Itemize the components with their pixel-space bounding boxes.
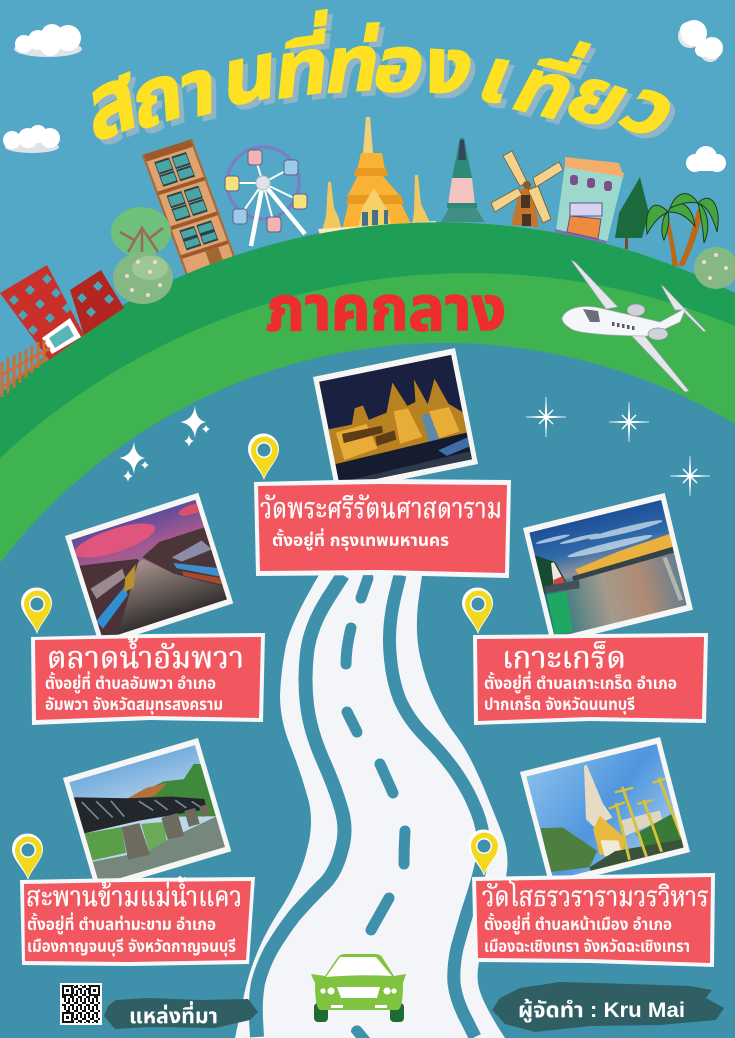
source label — [104, 998, 258, 1029]
pin: bottom left — [12, 834, 43, 880]
sparkles right — [526, 397, 710, 496]
icon: car — [311, 954, 406, 1022]
cloud top left — [14, 24, 82, 57]
card body: ตั้งอยู่ที่ กรุงเทพมหานคร — [272, 528, 449, 551]
card body: ตั้งอยู่ที่ ตำบลอัมพวา อำเภอ — [45, 671, 216, 694]
title shadow: ส — [86, 47, 147, 168]
pin: centre — [248, 434, 279, 480]
card: right: ปากเกร็ด จังหวัดนนทบุรี — [484, 694, 635, 715]
card body: ตั้งอยู่ที่ ตำบลเกาะเกร็ด อำเภอ — [484, 671, 677, 694]
green stupa — [441, 138, 485, 222]
hill: light green band — [0, 273, 735, 1038]
card: right — [473, 633, 708, 725]
tree behind building — [111, 207, 171, 258]
photo: Koh Kret — [523, 493, 693, 645]
card: bottom right: เมืองฉะเชิงเทรา จังหวัดฉะเชิงเทรา — [484, 937, 690, 956]
brick building — [142, 139, 236, 275]
road — [235, 575, 508, 1038]
road surface — [235, 575, 508, 1038]
hill: dark green — [0, 222, 735, 1038]
card: bottom left: เมืองกาญจนบุรี จังหวัดกาญจนบุรี — [27, 937, 236, 957]
cloud top right — [678, 20, 723, 62]
title shadow — [86, 13, 702, 168]
title text: ง — [412, 23, 486, 111]
temple — [318, 117, 436, 235]
photo: River Kwai bridge — [63, 738, 231, 891]
photo: Amphawa market — [65, 492, 236, 647]
road centre dashes — [346, 578, 405, 1038]
pine tree — [615, 177, 649, 249]
photo: Wat Sothon — [520, 737, 690, 887]
card title: ตลาดน้ำอัมพวา — [47, 636, 244, 675]
road right gap — [390, 575, 484, 1037]
card: bottom left — [20, 876, 255, 966]
ferris wheel — [225, 147, 320, 259]
title text: ว — [605, 65, 697, 153]
card: centre — [254, 479, 511, 578]
title shadow: ท่ — [324, 24, 393, 115]
title text: ที่ — [499, 33, 598, 136]
title shadow: เ — [471, 37, 533, 124]
card: bottom right — [472, 873, 715, 967]
title text: น — [222, 24, 278, 125]
pin: bottom right — [468, 830, 499, 876]
card: left: อัมพวา จังหวัดสมุทรสงคราม — [45, 695, 223, 715]
bush right — [694, 247, 735, 289]
road left gap — [256, 575, 344, 1037]
QR code — [60, 983, 102, 1025]
windmill — [491, 151, 563, 227]
airplane — [562, 260, 706, 392]
title text: ถ — [130, 43, 186, 149]
title text: เ — [466, 32, 528, 119]
creator label — [492, 982, 724, 1032]
title text — [81, 8, 697, 163]
bush left — [113, 252, 173, 304]
title shadow: า — [186, 45, 221, 143]
palm trees — [647, 194, 718, 266]
pin: left — [21, 588, 52, 634]
pin: right — [462, 588, 493, 634]
title text: อ — [365, 21, 436, 108]
title — [81, 8, 702, 168]
cloud left — [3, 125, 60, 153]
lower blue field — [0, 343, 735, 1038]
title shadow: ว — [610, 70, 702, 158]
fence — [0, 340, 50, 397]
cloud right — [686, 146, 726, 172]
source text: แหล่งที่มา — [129, 1001, 218, 1028]
teal house — [555, 157, 624, 244]
title shadow: ย — [556, 57, 652, 149]
photo: Wat Phra Kaew — [313, 348, 478, 493]
title text: ท่ — [319, 19, 388, 110]
title text: ที่ — [271, 8, 335, 117]
card title: เกาะเกร็ด — [502, 641, 626, 675]
title shadow: อ — [370, 26, 441, 113]
region heading: ภาคกลาง — [266, 275, 506, 344]
title shadow: น — [227, 29, 283, 130]
card title: วัดพระศรีรัตนศาสดาราม — [260, 493, 502, 525]
title shadow: ถ — [135, 48, 191, 154]
title text: ย — [551, 52, 647, 144]
card body: ตั้งอยู่ที่ ตำบลหน้าเมือง อำเภอ — [484, 912, 672, 935]
card body: ตั้งอยู่ที่ ตำบลท่ามะขาม อำเภอ — [27, 912, 216, 935]
card: left — [31, 633, 265, 725]
title shadow: ที่ — [276, 13, 340, 122]
title text: า — [181, 40, 216, 138]
card title: สะพานข้ามแม่น้ำแคว — [26, 876, 242, 913]
sparkles left — [119, 406, 210, 482]
red building — [0, 265, 124, 360]
title shadow: ที่ — [504, 38, 603, 141]
creator text: ผู้จัดทำ : Kru Mai — [518, 999, 685, 1023]
title text: ส — [81, 42, 142, 163]
title shadow: ง — [417, 28, 491, 116]
